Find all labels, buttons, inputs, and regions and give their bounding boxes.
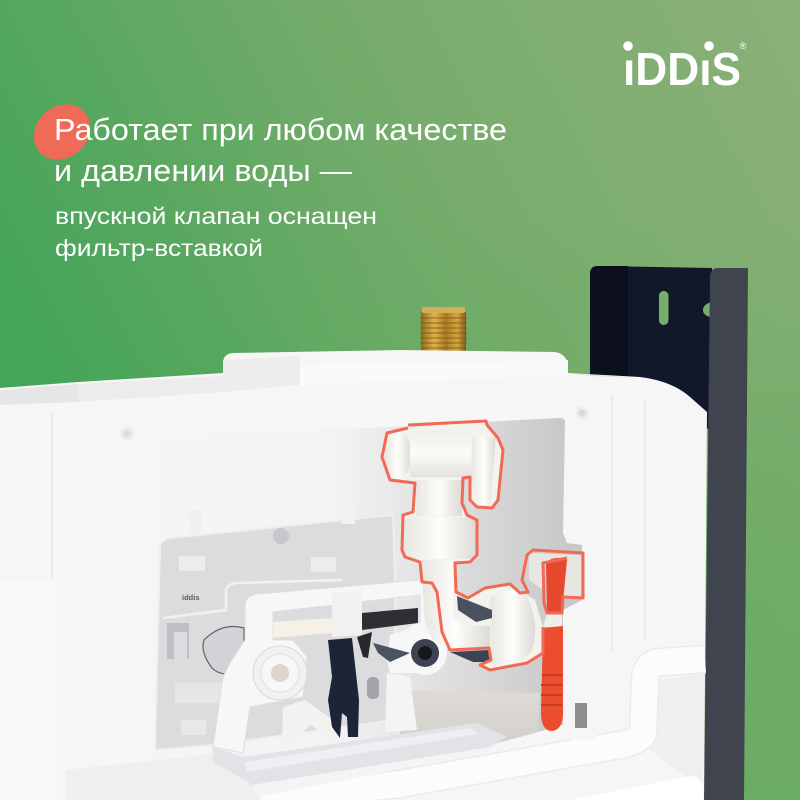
cistern body [0,350,707,800]
subheading: фильтр-вставкой [55,235,263,261]
brass fitting [420,307,467,352]
valve body shading [384,431,581,664]
black mounting bracket [590,266,748,800]
subheading [55,203,377,261]
logo: iddis: ® [740,41,747,51]
valve fill silhouette [382,421,543,670]
heading: Работает при любом качестве [54,112,507,147]
flush plate logo: iddis [182,593,200,602]
heading: и давлении воды — [54,153,352,188]
subheading: впускной клапан оснащен [55,203,377,229]
logo: iddis: ıDDıS [623,43,741,95]
coral outline [408,421,583,613]
right body pipe channel [260,659,705,800]
inner cavity [0,418,582,800]
white valve mechanism [213,580,447,753]
heading [54,112,507,188]
grey flush plate [155,502,395,750]
highlighted inlet valve [382,421,583,731]
lower tray [213,723,507,797]
accent blob [23,93,101,171]
red filter insert [541,558,567,731]
